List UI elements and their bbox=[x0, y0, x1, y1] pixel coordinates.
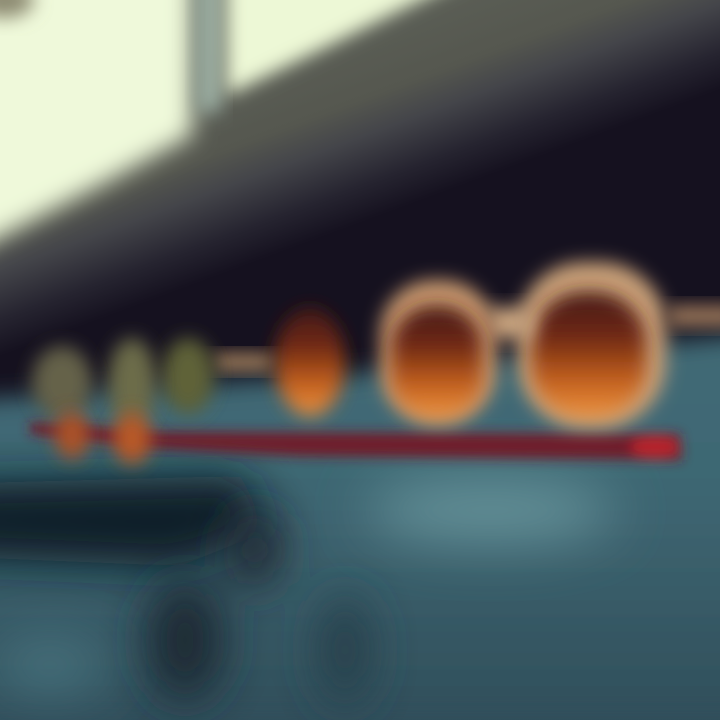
frame: small right bbox=[108, 338, 156, 426]
sunglasses: largest pair bbox=[380, 262, 720, 428]
bridge bbox=[488, 308, 532, 338]
sunglasses: medium pair bbox=[162, 308, 345, 416]
bridge bbox=[214, 354, 272, 370]
lens: medium left, green tint bbox=[162, 338, 214, 414]
window: bright left pane bbox=[0, 0, 192, 268]
background: teal counter bbox=[0, 332, 720, 720]
window: bright right pane bbox=[226, 0, 540, 96]
background: light reflection on counter bbox=[0, 478, 615, 691]
shelf: red strip bbox=[30, 422, 682, 460]
background: dark shapes on counter bbox=[145, 510, 371, 706]
background: teal counter underlay bbox=[0, 470, 720, 720]
window: dim top-left corner bbox=[0, 0, 34, 18]
lens: medium right bbox=[275, 308, 345, 416]
lens: left large bbox=[392, 306, 482, 418]
frame: left large bbox=[380, 280, 496, 424]
lens: right large bbox=[532, 292, 646, 418]
window: divider bbox=[197, 0, 221, 112]
frame: small left bbox=[32, 346, 92, 418]
sunglasses: small pair bbox=[32, 338, 156, 464]
lens: small right lower bbox=[113, 412, 151, 464]
temple arm bbox=[668, 306, 720, 326]
frame: right large bbox=[518, 262, 666, 428]
lens: small left lower bbox=[55, 411, 89, 459]
background: dark lower-left shadow bbox=[0, 476, 270, 566]
